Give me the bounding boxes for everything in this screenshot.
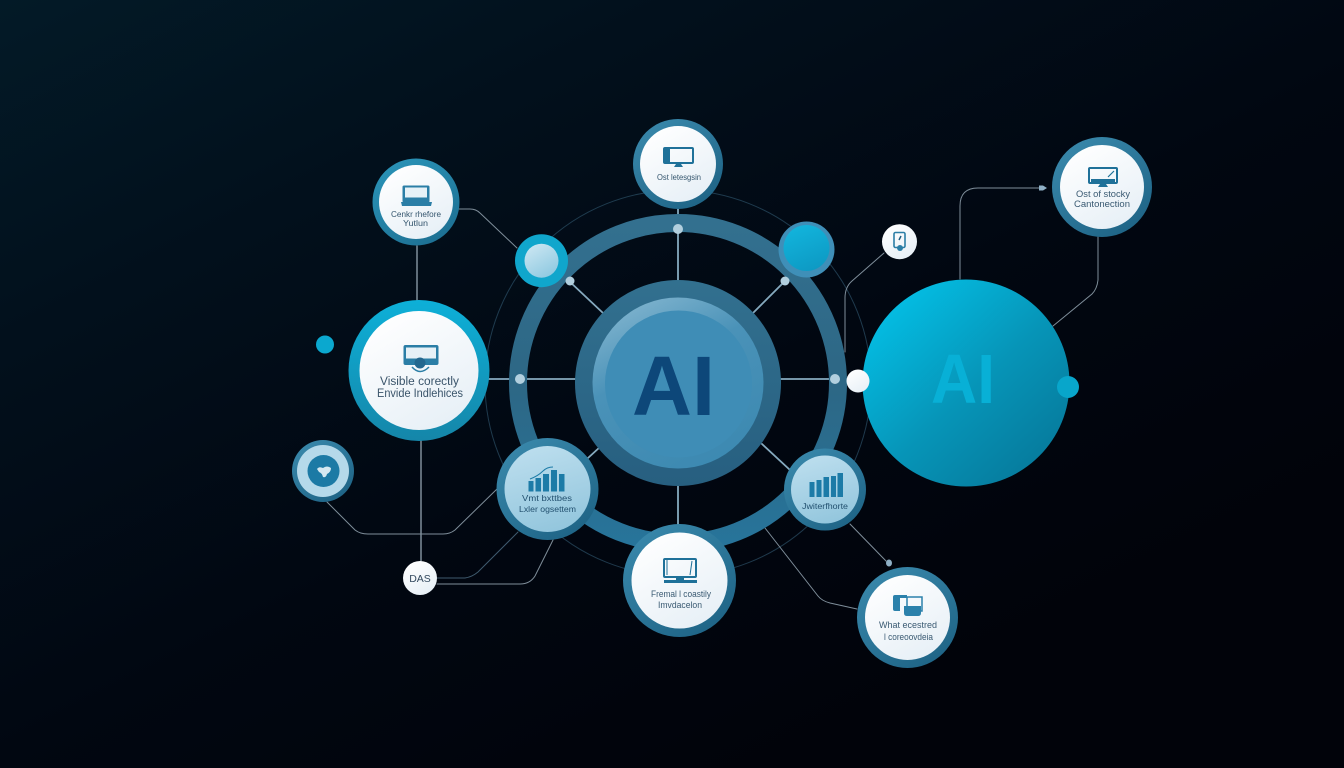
node label: Vmt bxttbes — [522, 493, 572, 503]
teal floating dot — [316, 336, 334, 354]
icon: bar chart — [528, 467, 564, 492]
node: bottom left chart — [496, 438, 598, 540]
white connector dot — [846, 370, 870, 392]
core face — [605, 310, 752, 458]
node label: Visible corectly — [380, 376, 459, 388]
node: top right — [1052, 137, 1152, 237]
node label: Imvdacelon — [658, 600, 702, 610]
node label: Fremal l coastily — [651, 589, 711, 599]
icon: monitor — [1089, 168, 1117, 187]
node label: Cantonection — [1074, 199, 1130, 209]
AI watermark label: AI — [931, 340, 995, 418]
node label: Ost of stocky — [1076, 189, 1131, 199]
node: phone — [882, 224, 917, 259]
big AI circle — [862, 280, 1070, 486]
node label: Ost letesgsin — [657, 173, 701, 182]
node: DAS: DAS — [409, 573, 431, 585]
main ring — [518, 223, 838, 543]
thin network links — [327, 188, 1098, 609]
node label: Yutlun — [403, 218, 428, 228]
node: bottom right chart — [784, 448, 866, 530]
icon: bar chart — [810, 473, 843, 497]
connector joints — [515, 224, 840, 384]
node label: l coreoovdeia — [884, 632, 933, 642]
icon: monitor with person — [404, 345, 438, 372]
connector lines — [327, 188, 1098, 609]
faint orbit ring — [485, 190, 871, 576]
spokes from the AI core — [489, 209, 850, 524]
icon: monitor — [664, 559, 697, 583]
core outer rim — [575, 280, 781, 486]
node label: Lxler ogsettem — [519, 504, 576, 514]
node: DAS — [403, 561, 437, 595]
node: left large — [348, 300, 490, 441]
icon: folders — [893, 595, 922, 616]
icon: map blob — [317, 466, 331, 477]
node: top left — [372, 158, 460, 246]
node label: What ecestred — [879, 620, 937, 630]
node label: Envide Indlehices — [377, 388, 463, 400]
node: bottom centre — [623, 524, 736, 637]
icon: phone — [894, 232, 905, 251]
node: left small map — [292, 440, 354, 502]
sphere — [862, 280, 1070, 486]
icon: laptop — [401, 186, 432, 206]
teal connector dot — [1057, 376, 1079, 398]
AI core — [575, 280, 781, 486]
AI label: AI — [632, 339, 715, 433]
icon: arrow dot — [886, 560, 892, 566]
icon: arrow head — [1039, 186, 1047, 190]
icon: monitor — [664, 148, 693, 167]
core lip — [592, 298, 764, 468]
node label: Jwiterfhorte — [802, 501, 848, 511]
node: cyan ball left — [515, 234, 568, 287]
node: teal ball right — [778, 222, 834, 278]
node: lower right — [857, 567, 958, 668]
node: top centre — [633, 119, 723, 209]
node label: Cenkr rhefore — [391, 209, 441, 219]
